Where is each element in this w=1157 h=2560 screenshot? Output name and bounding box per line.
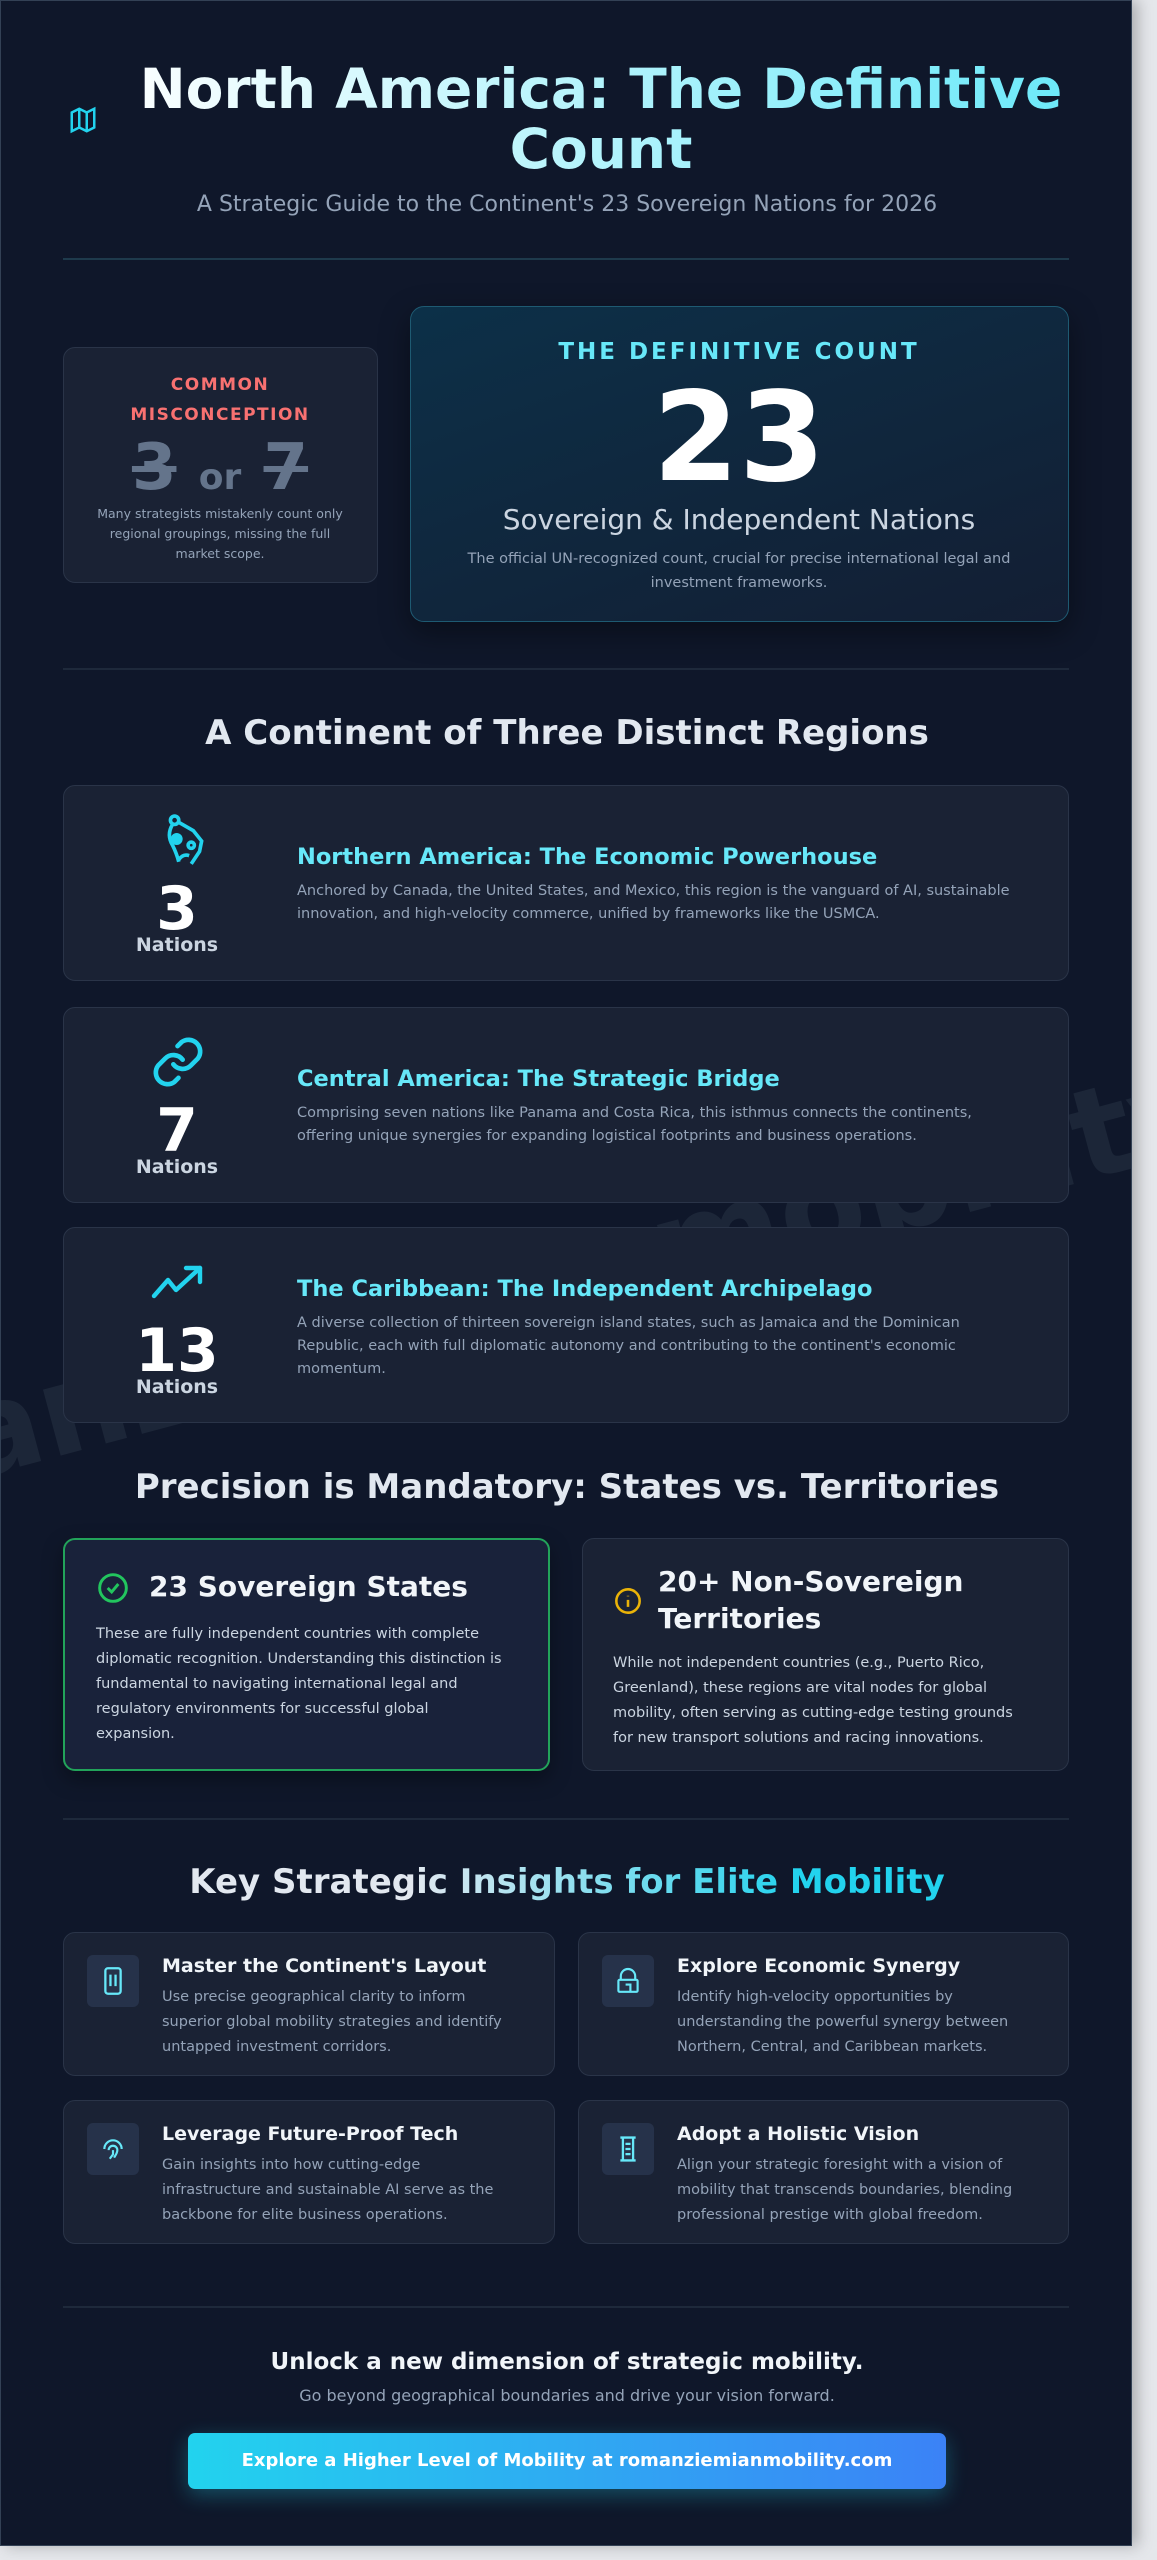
title: 20+ Non-Sovereign	[658, 1565, 963, 1598]
label: nations: Nations	[136, 1156, 218, 1178]
title	[101, 59, 1101, 179]
misconception text: Many strategists mistakenly count only regional groupings, missing the full market scope.	[97, 506, 343, 561]
title	[658, 1565, 963, 1635]
big number: 23	[653, 366, 825, 510]
icon: link	[154, 1038, 202, 1086]
title: Count	[510, 117, 692, 181]
misconception label	[130, 375, 310, 425]
title: The Caribbean: The Independent Archipelago	[297, 1276, 872, 1302]
struck numbers: 3 or 7	[132, 431, 308, 505]
title: Adopt a Holistic Vision	[677, 2123, 919, 2145]
text: Gain insights into how cutting-edge infrastructure and sustainable AI serve as the backbone for elite business operations.	[162, 2157, 493, 2223]
text: Align your strategic foresight with a vision of mobility that transcends boundaries, blending professional prestige with global freedom.	[677, 2157, 1012, 2223]
title: Northern America: The Economic Powerhouse	[297, 844, 877, 870]
title: North America: The Definitive	[140, 57, 1062, 121]
text: Use precise geographical clarity to inform superior global mobility strategies and identify untapped investment corridors.	[162, 1989, 502, 2055]
number: 13: 13	[135, 1316, 219, 1386]
text: These are fully independent countries with complete diplomatic recognition. Understanding this distinction is fundamental to navigating international legal and regulatory environments for successful global expansion.	[96, 1626, 502, 1742]
misconception label: COMMON	[171, 375, 269, 395]
panel: sovereign states	[63, 1538, 550, 1771]
panel: territories	[582, 1538, 1069, 1771]
cta subtext: Go beyond geographical boundaries and drive your vision forward.	[299, 2386, 835, 2405]
insight: master layout	[63, 1932, 555, 2076]
label: nations: Nations	[136, 1376, 218, 1398]
cta button: Explore a Higher Level of Mobility at romanziemianmobility.com	[242, 2450, 892, 2471]
panel: misconception	[63, 347, 378, 583]
title: Territories	[658, 1602, 821, 1635]
insight: economic synergy	[578, 1932, 1069, 2076]
panel: central america	[63, 1007, 1069, 1203]
title: 23 Sovereign States	[149, 1570, 468, 1603]
icon: document	[602, 2123, 654, 2175]
icon: globe person	[168, 814, 204, 865]
number: 7: 7	[156, 1096, 198, 1166]
panel: caribbean	[63, 1227, 1069, 1423]
icon: trend arrow	[152, 1266, 202, 1298]
icon: phone	[87, 1955, 139, 2007]
subtitle: A Strategic Guide to the Continent's 23 Sovereign Nations for 2026	[197, 192, 937, 217]
count description: The official UN-recognized count, crucial for precise international legal and investment frameworks.	[468, 551, 1010, 591]
description: A diverse collection of thirteen sovereign island states, such as Jamaica and the Dominican Republic, each with full diplomatic autonomy and contributing to the continent's economic momentum.	[297, 1315, 960, 1377]
icon: info	[615, 1588, 641, 1614]
number: 3: 3	[156, 874, 198, 944]
panel: northern america	[63, 785, 1069, 981]
heading: insights: Key Strategic Insights for Elite Mobility	[189, 1862, 945, 1902]
text: Identify high-velocity opportunities by understanding the powerful synergy between Northern, Central, and Caribbean markets.	[677, 1989, 1008, 2055]
cta heading: Unlock a new dimension of strategic mobility.	[271, 2349, 863, 2375]
icon: map	[70, 106, 96, 134]
icon: check	[98, 1573, 128, 1603]
count subtitle: Sovereign & Independent Nations	[503, 503, 975, 536]
count label: THE DEFINITIVE COUNT	[558, 339, 920, 365]
title: Explore Economic Synergy	[677, 1955, 960, 1977]
insight: future tech	[63, 2100, 555, 2244]
insight: holistic vision	[578, 2100, 1069, 2244]
text: While not independent countries (e.g., Puerto Rico, Greenland), these regions are vital nodes for global mobility, often serving as cutting-edge testing grounds for new transport solutions and racing innovations.	[613, 1655, 1013, 1746]
description: Anchored by Canada, the United States, and Mexico, this region is the vanguard of AI, sustainable innovation, and high-velocity commerce, unified by frameworks like the USMCA.	[297, 883, 1010, 922]
icon: lock	[602, 1955, 654, 2007]
title: Central America: The Strategic Bridge	[297, 1066, 780, 1092]
panel: definitive count	[410, 306, 1069, 622]
cta button	[188, 2433, 946, 2489]
description: Comprising seven nations like Panama and Costa Rica, this isthmus connects the continents, offering unique synergies for expanding logistical footprints and business operations.	[297, 1105, 972, 1144]
heading: states vs territories: Precision is Mandatory: States vs. Territories	[135, 1467, 999, 1507]
icon: fingerprint	[87, 2123, 139, 2175]
misconception label: MISCONCEPTION	[130, 405, 310, 425]
title: Leverage Future-Proof Tech	[162, 2123, 458, 2145]
title: Master the Continent's Layout	[162, 1955, 486, 1977]
label: nations: Nations	[136, 934, 218, 956]
heading: regions: A Continent of Three Distinct Regions	[205, 713, 929, 753]
